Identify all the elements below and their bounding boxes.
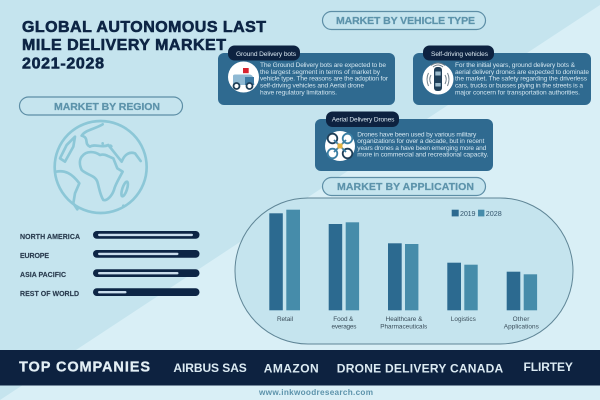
panel: self-driving vehicles: Self-driving vehicles [431, 51, 489, 58]
panel: self-driving vehicles: the market. The safety regarding the driverless [455, 76, 588, 83]
icon: drone [325, 131, 355, 161]
panel: ground delivery bots [218, 46, 395, 105]
region bars [20, 231, 200, 298]
chart: market by application [235, 198, 573, 344]
icon: autonomous car [422, 63, 454, 94]
heading: market by vehicle type [322, 12, 486, 30]
panel: aerial delivery drones: more in commercial and recreational capacity. [357, 151, 488, 158]
footer band: top companies: DRONE DELIVERY CANADA [337, 362, 504, 376]
icon: delivery van [228, 62, 259, 92]
region: Rest of World: REST OF WORLD [20, 291, 79, 298]
region: North America [20, 231, 200, 241]
panel: ground delivery bots: The Ground Delivery bots are expected to be [260, 62, 386, 69]
panel: self-driving vehicles [413, 46, 591, 105]
icon: globe [55, 121, 147, 213]
chart legend [452, 209, 502, 218]
panel: ground delivery bots: vehicle type. The reasons are the adoption for [260, 76, 389, 83]
panel: ground delivery bots: Ground Delivery bots [236, 51, 297, 58]
panel: aerial delivery drones: organizations for over a decade, but in recent [357, 138, 484, 145]
website url: www.inkwoodresearch.com [258, 388, 373, 397]
region: North America: NORTH AMERICA [20, 234, 80, 241]
heading: market by application [322, 178, 486, 196]
panel: aerial delivery drones: Drones have been used by various military [357, 131, 477, 138]
footer band: top companies: AIRBUS SAS [173, 361, 247, 375]
footer band: top companies: TOP COMPANIES [19, 360, 150, 376]
region: Europe: EUROPE [20, 253, 49, 260]
panel: ground delivery bots: have regulatory limitations. [260, 89, 337, 96]
bars: retail: Retail [277, 316, 293, 323]
chart legend: 2028 [486, 209, 502, 218]
heading: market by application: MARKET BY APPLICATION [337, 181, 474, 193]
bars: healthcare and pharmaceuticals: Pharmaceuticals [380, 323, 427, 330]
region: Rest of World [20, 288, 200, 298]
title: MILE DELIVERY MARKET [22, 37, 226, 54]
footer band: top companies: FLIRTEY [524, 360, 573, 374]
panel: aerial delivery drones: years drones a have been emerging more and [357, 145, 487, 152]
panel: self-driving vehicles: cars, trucks or busses plying in the streets is a [455, 82, 583, 89]
region: Europe [20, 250, 200, 260]
panel: self-driving vehicles: major concern for transportation authorities. [455, 89, 580, 96]
title: 2021-2028 [22, 56, 104, 72]
bars: food and beverages [329, 222, 359, 330]
bars: other applications: Other [513, 316, 530, 323]
heading: market by region: MARKET BY REGION [54, 101, 160, 113]
panel: aerial delivery drones [315, 112, 493, 171]
bars: food and beverages: Food & [333, 316, 354, 323]
region: Asia Pacific [20, 269, 200, 279]
bars: healthcare and pharmaceuticals: Healthcare & [386, 316, 423, 323]
heading: market by vehicle type: MARKET BY VEHICLE TYPE [336, 15, 475, 27]
title [22, 19, 266, 72]
bars: logistics: Logistics [451, 316, 476, 323]
bars: other applications [504, 272, 539, 330]
bars: logistics [447, 263, 478, 323]
bars: food and beverages: everages [332, 323, 356, 330]
bars: other applications: Applications [504, 323, 539, 330]
title: GLOBAL AUTONOMOUS LAST [22, 19, 266, 36]
region: Asia Pacific: ASIA PACIFIC [20, 272, 66, 279]
bars: healthcare and pharmaceuticals [380, 243, 427, 330]
panel: self-driving vehicles: aerial delivery drones are expected to dominate [455, 69, 589, 76]
panel: aerial delivery drones: Aerial Delivery Drones [332, 117, 395, 124]
footer band: top companies [0, 350, 600, 386]
heading: market by region [20, 97, 182, 115]
panel: self-driving vehicles: For the initial years, ground delivery bots & [455, 62, 576, 69]
panel: ground delivery bots: the largest segment in terms of market by [260, 69, 381, 76]
panel: ground delivery bots: self-driving vehicles and Aerial drone [260, 82, 364, 89]
chart legend: 2019 [460, 209, 476, 218]
bars: retail [269, 210, 300, 323]
footer band: top companies: AMAZON [264, 362, 319, 376]
